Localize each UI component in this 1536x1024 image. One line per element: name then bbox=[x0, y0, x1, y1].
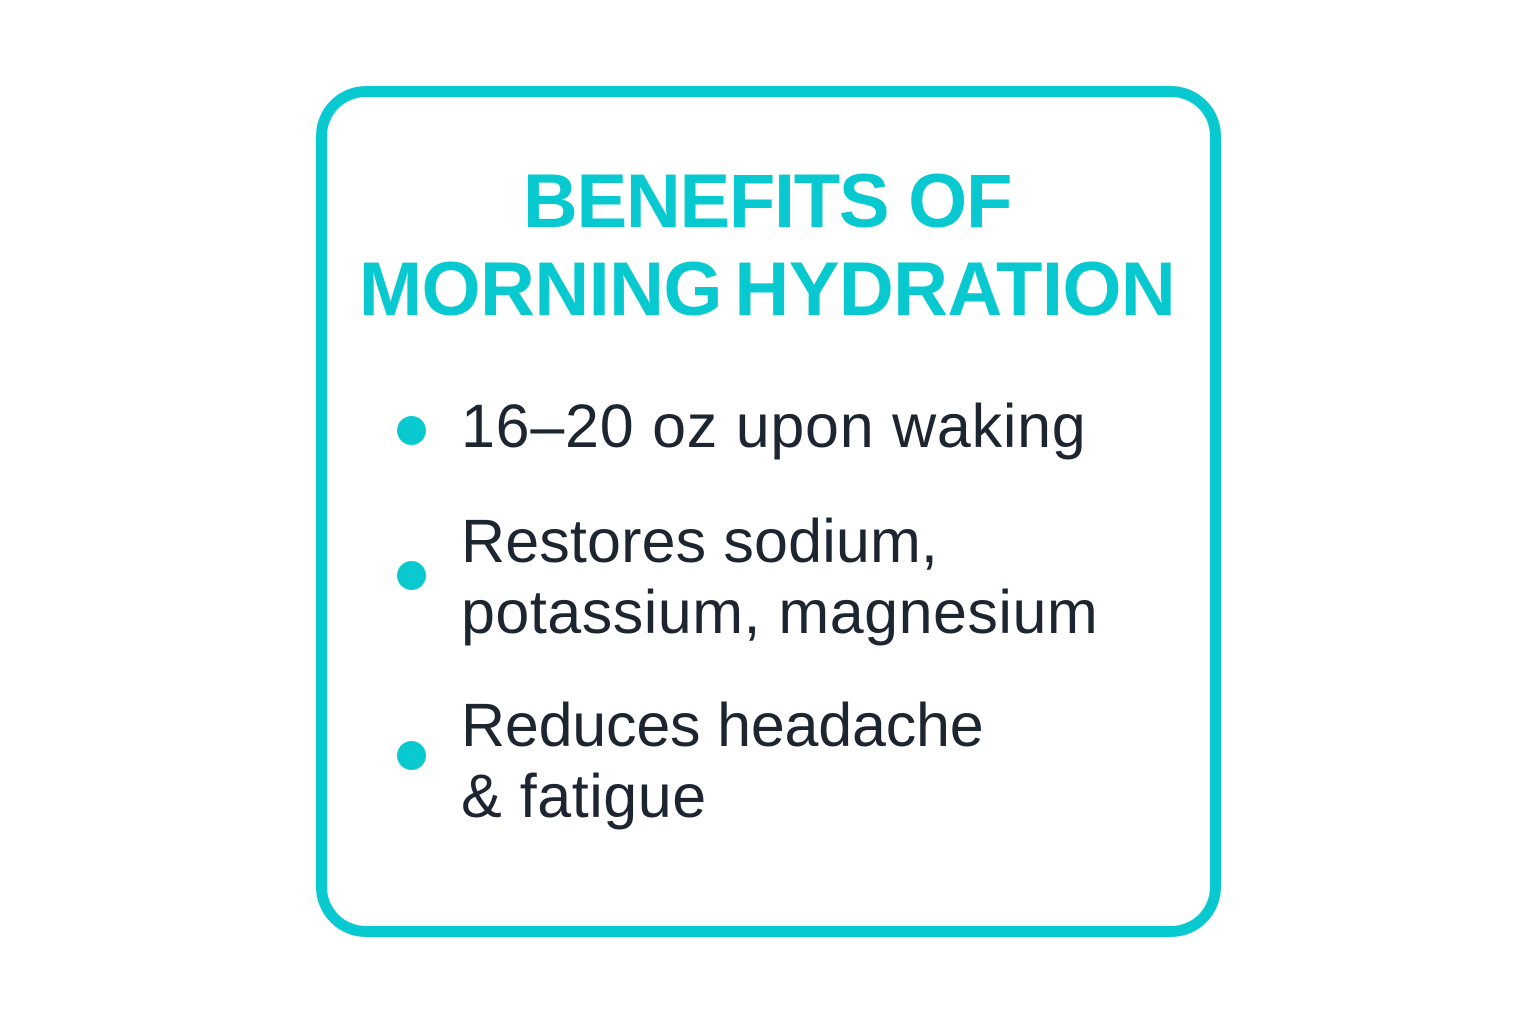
heading: title: BENEFITS OF bbox=[523, 159, 1011, 244]
text: bullet 1: 16–20 oz upon waking bbox=[461, 392, 1086, 460]
text: bullet 2: Restores sodium, bbox=[461, 507, 938, 575]
text: bullet 3: & fatigue bbox=[461, 762, 707, 830]
text: bullet 2 bbox=[461, 507, 1098, 646]
heading: title: MORNING HYDRATION bbox=[359, 247, 1175, 332]
panel: rounded card bbox=[316, 86, 1221, 937]
heading: title bbox=[359, 159, 1175, 332]
icon: bullet 3 bbox=[397, 741, 426, 770]
text: bullet 3: Reduces headache bbox=[461, 691, 983, 759]
text: bullet 2: potassium, magnesium bbox=[461, 578, 1098, 646]
icon: bullet 1 bbox=[397, 416, 426, 445]
icon: bullet 2 bbox=[397, 561, 426, 590]
text: bullet 3 bbox=[461, 691, 983, 830]
